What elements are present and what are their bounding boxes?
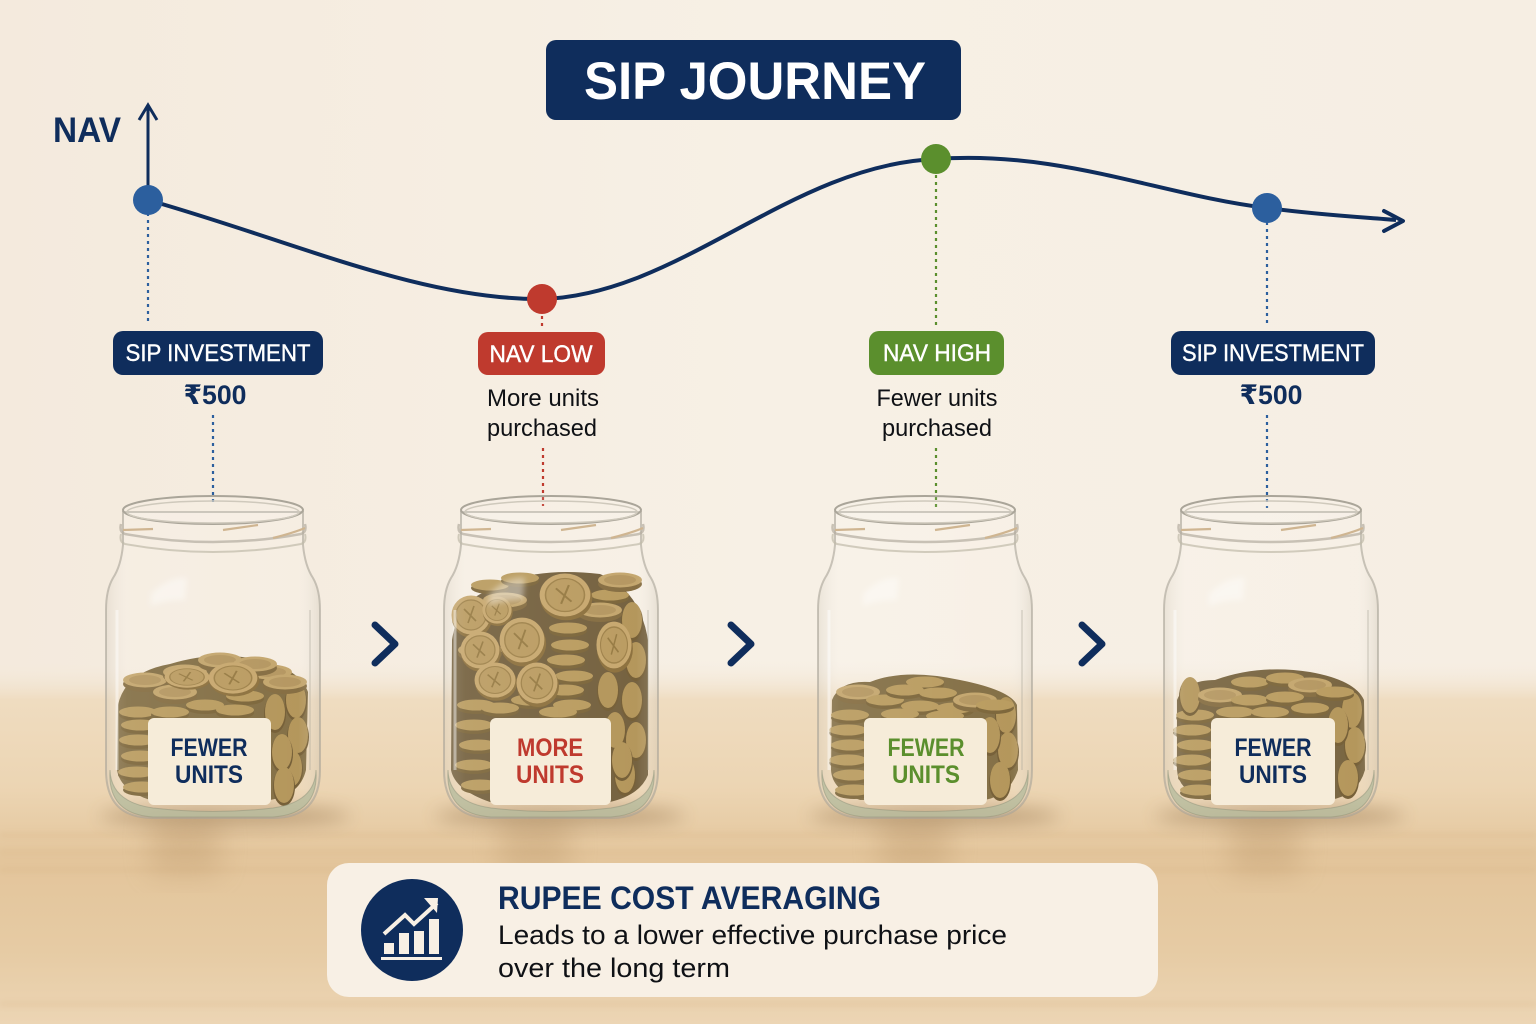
label: NAV low: NAV LOW — [490, 341, 593, 368]
arrow: jar 1 to jar 2 — [375, 625, 395, 663]
NAV axis arrow — [139, 105, 157, 200]
jar 4 label: FEWER — [1234, 734, 1312, 762]
title: SIP JOURNEY — [584, 52, 926, 111]
jar 4: fewer units — [1164, 496, 1378, 818]
label: SIP investment 2: SIP INVESTMENT — [1182, 340, 1364, 367]
jar 4 label: UNITS — [1239, 761, 1307, 789]
label: NAV high: NAV HIGH — [883, 340, 991, 367]
label: SIP investment 2 — [1171, 331, 1375, 410]
NAV line chart — [133, 144, 1403, 314]
title — [546, 40, 961, 120]
panel body text — [498, 920, 1007, 983]
label: NAV high — [869, 331, 1004, 442]
label: NAV low — [478, 332, 605, 442]
jar 3 label: UNITS — [892, 761, 960, 789]
jar 1: fewer units — [106, 496, 320, 818]
jar 2: more units — [444, 496, 658, 818]
background wall — [0, 0, 1536, 700]
wooden table — [0, 660, 1536, 1024]
panel heading: RUPEE COST AVERAGING — [498, 880, 881, 916]
jar 1 label: UNITS — [175, 761, 243, 789]
jar 1 label — [148, 718, 271, 805]
jar 1 label: FEWER — [170, 734, 248, 762]
label: NAV high: Fewer units — [876, 385, 998, 412]
jar 2 label: MORE — [517, 734, 583, 762]
panel body text: Leads to a lower effective purchase price — [498, 920, 1007, 950]
label: NAV high: purchased — [882, 415, 992, 442]
jar 3 label — [864, 718, 987, 805]
label: SIP investment 1: SIP INVESTMENT — [126, 340, 311, 367]
icon: growth chart — [361, 879, 463, 981]
jar 2 label — [490, 718, 611, 805]
label: SIP investment 1: ₹500 — [184, 380, 246, 410]
dotted connector lines — [148, 175, 1267, 510]
label: NAV low: More units — [487, 385, 599, 412]
jar 4 label — [1211, 718, 1335, 805]
label: SIP investment 1 — [113, 331, 323, 410]
panel body text: over the long term — [498, 953, 730, 983]
jar 2 label: UNITS — [516, 761, 584, 789]
label: SIP investment 2: ₹500 — [1240, 380, 1302, 410]
arrow: jar 2 to jar 3 — [731, 625, 751, 663]
NAV axis label: NAV — [53, 111, 122, 150]
jar 3 label: FEWER — [888, 734, 964, 762]
panel: rupee cost averaging — [327, 863, 1158, 997]
arrow: jar 3 to jar 4 — [1082, 625, 1102, 663]
label: NAV low: purchased — [487, 415, 597, 442]
jar 3: fewer units (green) — [818, 496, 1032, 818]
